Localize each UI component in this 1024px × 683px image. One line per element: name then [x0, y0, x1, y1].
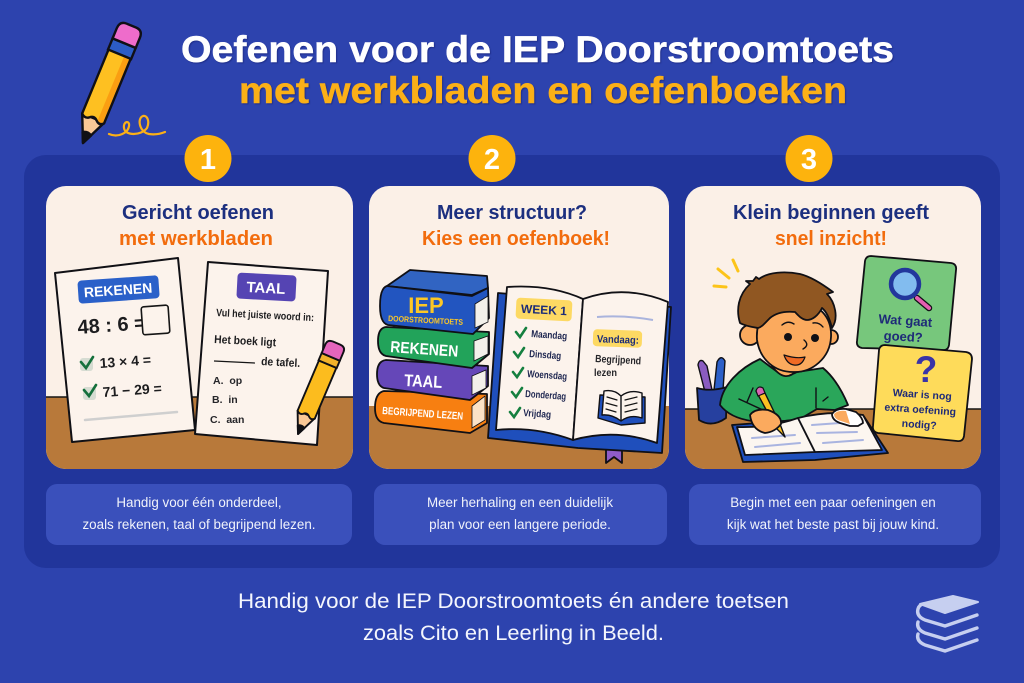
- card 3 heading: snel inzicht!: [775, 228, 887, 250]
- badge: number 1: 1: [200, 144, 216, 176]
- question text: de tafel.: [261, 356, 300, 370]
- caption 2: [374, 484, 667, 545]
- book: purple: TAAL: [404, 371, 443, 392]
- panel: card 3 start small: [685, 186, 981, 469]
- badge: number 3: [786, 135, 832, 182]
- book: purple: [377, 360, 488, 400]
- caption 1: Handig voor één onderdeel,: [116, 495, 282, 510]
- note: wat gaat goed: goed?: [883, 328, 923, 345]
- sum: 48 : 6: [77, 305, 170, 339]
- card 1 background: [46, 186, 353, 469]
- note: extra oefening: Waar is nog: [892, 387, 952, 403]
- footer text: [238, 590, 789, 645]
- label: rekenen: [77, 275, 160, 304]
- note: wat gaat goed: Wat gaat: [878, 311, 933, 330]
- label: vandaag: [593, 329, 642, 348]
- book: green: [378, 327, 489, 368]
- book: orange: BEGRIJPEND LEZEN: [382, 405, 463, 423]
- open workbook: [488, 286, 671, 463]
- label: taal: [236, 273, 297, 302]
- label: vandaag: Vandaag:: [597, 333, 639, 347]
- worksheet: rekenen: [55, 258, 195, 442]
- text: begrijpend lezen: lezen: [594, 367, 617, 379]
- text: begrijpend lezen: Begrijpend: [595, 353, 641, 367]
- card 3 background: [685, 186, 981, 469]
- answer options: A. op: [213, 375, 242, 387]
- hair: [738, 272, 836, 328]
- bookmark: [606, 440, 622, 463]
- card 1 heading: Gericht oefenen: [122, 202, 274, 224]
- book: IEP: [380, 270, 489, 334]
- caption 3: [689, 484, 981, 545]
- label: week 1: WEEK 1: [521, 302, 568, 318]
- day list: Donderdag: [525, 389, 566, 403]
- book: orange: [375, 391, 487, 433]
- title: Oefenen voor de IEP Doorstroomtoets: [181, 29, 894, 70]
- day list: Vrijdag: [523, 408, 551, 421]
- day list: [510, 328, 567, 421]
- head: [738, 272, 838, 376]
- text: begrijpend lezen: [594, 353, 641, 379]
- panel: card 2 workbooks: [369, 186, 671, 469]
- sparkles: [714, 260, 738, 287]
- question text: Het boek ligt: [214, 334, 277, 349]
- caption 3: Begin met een paar oefeningen en: [730, 495, 936, 510]
- title: met werkbladen en oefenboeken: [239, 70, 847, 111]
- card 2 heading: [422, 202, 610, 250]
- right page: [573, 292, 668, 443]
- note: extra oefening: ?: [915, 349, 937, 390]
- mouth: [784, 355, 805, 365]
- note: extra oefening: nodig?: [901, 418, 937, 432]
- label: rekenen: REKENEN: [83, 280, 153, 300]
- badge: number 2: [468, 135, 516, 182]
- book: IEP: DOORSTROOMTOETS: [388, 314, 464, 327]
- card 1 heading: [119, 202, 274, 250]
- note: extra oefening: [873, 345, 972, 441]
- right hand: [832, 409, 863, 426]
- open notebook: [732, 413, 888, 462]
- sum: 13 x 4: 13 × 4 =: [99, 351, 151, 371]
- book: green: REKENEN: [390, 339, 459, 361]
- sum: 48 : 6: 48 : 6 =: [77, 312, 147, 339]
- card 3 heading: [733, 202, 929, 250]
- caption 2: plan voor een langere periode.: [429, 517, 611, 532]
- card 2 background: [369, 186, 669, 469]
- caption 2: Meer herhaling en een duidelijk: [427, 495, 613, 510]
- icon: small book: [598, 391, 645, 425]
- footer text: Handig voor de IEP Doorstroomtoets én andere toetsen: [238, 590, 789, 613]
- caption 3: kijk wat het beste past bij jouw kind.: [727, 517, 939, 532]
- day list: Woensdag: [527, 369, 567, 383]
- panel: main steps container: [24, 155, 1000, 568]
- badge: number 2: 2: [484, 144, 500, 176]
- sum: 71 - 29: 71 − 29 =: [102, 380, 162, 400]
- icon: pencil with squiggle: [71, 21, 165, 148]
- day list: Dinsdag: [529, 349, 561, 362]
- icon: pencil cup: [697, 358, 727, 424]
- footer text: zoals Cito en Leerling in Beeld.: [363, 622, 664, 645]
- book: IEP: IEP: [408, 293, 444, 318]
- sweater: [720, 359, 848, 424]
- book stack: [375, 270, 489, 433]
- left page: [496, 286, 583, 440]
- note: wat gaat goed: [857, 256, 956, 350]
- boy: [720, 272, 848, 424]
- hand with pencil: [750, 387, 785, 437]
- icon: magnifier: [891, 270, 929, 308]
- label: week 1: [515, 298, 572, 321]
- answer options: B. in: [212, 394, 238, 406]
- badge: number 1: [184, 135, 232, 182]
- card 3 heading: Klein beginnen geeft: [733, 202, 929, 224]
- worksheet: taal: [195, 262, 328, 445]
- answer options: [210, 375, 244, 426]
- question text: [214, 307, 314, 370]
- title: [181, 29, 894, 111]
- question text: Vul het juiste woord in:: [216, 307, 314, 324]
- answer options: C. aan: [210, 414, 244, 426]
- card 2 heading: Kies een oefenboek!: [422, 228, 610, 250]
- badge: number 3: 3: [801, 144, 817, 176]
- icon: pencil on worksheet: [289, 339, 346, 438]
- caption 1: zoals rekenen, taal of begrijpend lezen.: [82, 517, 316, 532]
- card 2 heading: Meer structuur?: [437, 202, 587, 224]
- card 1 heading: met werkbladen: [119, 228, 273, 250]
- panel: card 1 worksheets: [46, 186, 353, 469]
- label: taal: TAAL: [246, 279, 286, 298]
- note: extra oefening: extra oefening: [884, 402, 956, 418]
- icon: book stack: [918, 596, 978, 651]
- caption 1: [46, 484, 352, 545]
- day list: Maandag: [531, 329, 567, 343]
